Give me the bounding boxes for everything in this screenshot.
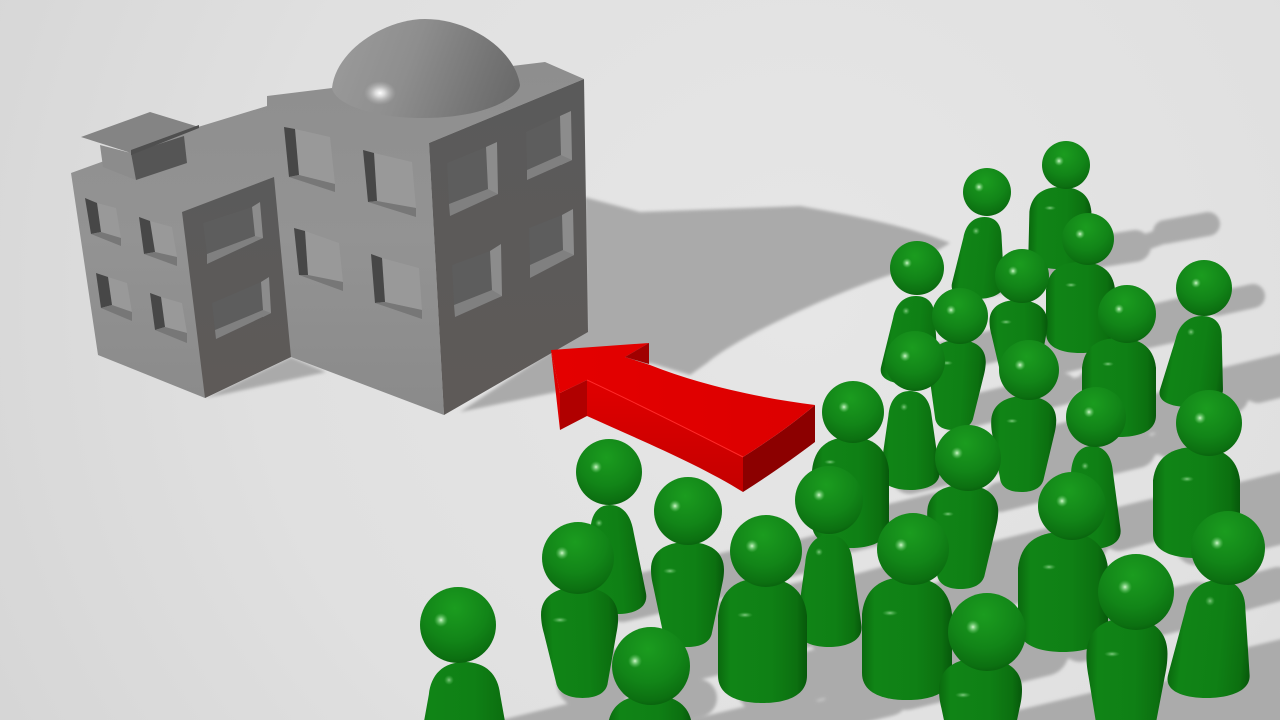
figure 3 — [1046, 213, 1115, 353]
red arrow — [551, 343, 815, 492]
arrow head under face — [560, 380, 587, 430]
windows on dark faces — [203, 111, 574, 339]
figure 16 — [1018, 472, 1108, 652]
arrow edge highlight — [587, 380, 743, 457]
figure 17 — [576, 439, 648, 614]
figure 19 — [862, 513, 952, 700]
arrow top face — [551, 343, 815, 457]
figure 10 — [989, 340, 1059, 492]
building shadow — [205, 197, 950, 412]
left block dark face — [182, 177, 291, 398]
crowd of green figures — [416, 141, 1265, 720]
building light faces and roof — [71, 62, 584, 415]
figure 8 — [1082, 285, 1156, 437]
figure 4 — [879, 241, 945, 384]
figure shadows — [464, 224, 1280, 720]
figure 11 — [812, 381, 889, 548]
figure 18 — [651, 477, 724, 647]
figure 15 — [795, 466, 863, 647]
roof box — [81, 112, 199, 180]
figure 14 — [1153, 390, 1242, 558]
arrow wing inner face — [625, 343, 649, 364]
figure 13 — [925, 425, 1001, 589]
windows on light faces — [85, 127, 422, 343]
figure 12 — [1063, 387, 1126, 549]
figure 21 — [1166, 511, 1265, 698]
figure 2 — [950, 168, 1011, 299]
figure 23 — [1085, 554, 1174, 720]
figure 25 — [608, 627, 692, 720]
figure 7 — [925, 288, 988, 430]
figure 9 — [880, 331, 945, 490]
figure 24 — [939, 593, 1026, 720]
figure 26 — [416, 587, 513, 720]
figure 5 — [1157, 260, 1234, 407]
right block dark face — [429, 79, 588, 415]
figure 22 — [540, 522, 621, 698]
building — [71, 19, 588, 415]
figure 6 — [989, 249, 1049, 384]
figure 1 — [1028, 141, 1092, 269]
arrow head left face — [551, 350, 560, 430]
arrow end face — [743, 405, 815, 492]
dome — [332, 19, 520, 118]
figure 20 — [718, 515, 807, 703]
arrow shaft side face — [587, 380, 743, 492]
